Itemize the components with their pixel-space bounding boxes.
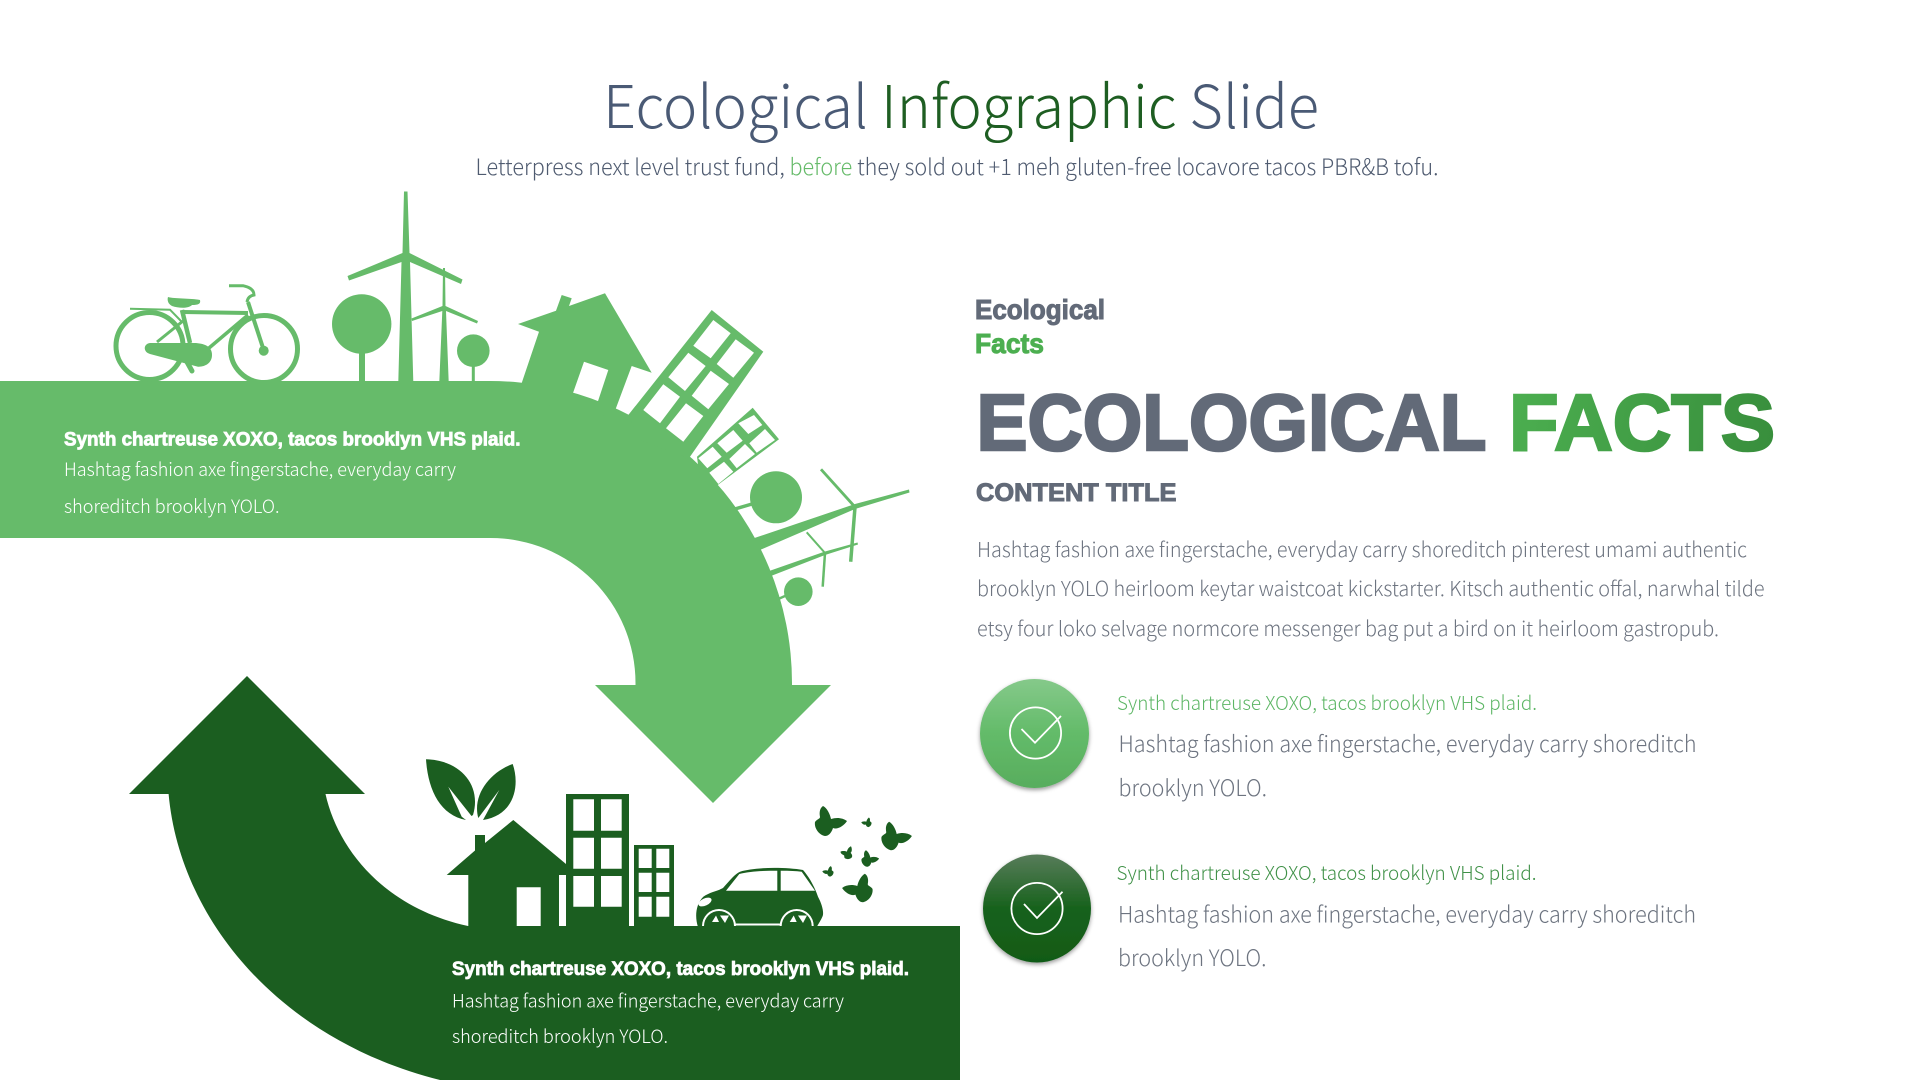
band heading: Synth chartreuse XOXO, tacos brooklyn VHS plaid. <box>452 958 909 980</box>
arrow: light green curved down <box>0 381 831 803</box>
text block: item one <box>1117 687 1696 803</box>
text block: item two: brooklyn YOLO. <box>1118 941 1266 973</box>
body paragraph <box>977 533 1764 642</box>
small heading <box>975 294 1105 359</box>
icon: small wind turbine <box>412 268 478 382</box>
body paragraph: etsy four loko selvage normcore messenger bag put a bird on it heirloom gastropub. <box>977 612 1719 642</box>
large heading <box>976 378 1775 467</box>
text block: item two: Hashtag fashion axe fingerstache, everyday carry shoreditch <box>1118 898 1696 930</box>
band line two: shoreditch brooklyn YOLO. <box>452 1023 668 1049</box>
icon: light green check badge <box>980 679 1089 788</box>
panel: ecological facts <box>975 294 1775 642</box>
icon: tilted large turbine <box>751 469 910 562</box>
icon: car <box>696 868 823 927</box>
icon: tilted house <box>518 293 652 420</box>
body paragraph: Hashtag fashion axe fingerstache, everyday carry shoreditch pinterest umami authentic <box>977 533 1747 563</box>
icon: leaves <box>426 759 516 820</box>
icon: tilted small tree <box>776 577 813 606</box>
icon: house <box>447 820 566 927</box>
icon: bicycle <box>116 286 298 382</box>
icon: small tree <box>457 334 490 382</box>
arrow: dark green curved up <box>129 676 960 1080</box>
light green arrow with scene <box>0 192 910 803</box>
dark green arrow with scene <box>129 676 960 1080</box>
text block: item one: brooklyn YOLO. <box>1118 771 1267 803</box>
icon: butterflies <box>815 806 912 902</box>
text block: item one: Synth chartreuse XOXO, tacos brooklyn VHS plaid. <box>1117 687 1537 716</box>
icon: small building <box>634 845 674 927</box>
icon: tilted small building <box>697 408 779 485</box>
content title: CONTENT TITLE <box>976 479 1176 507</box>
text block: item two <box>1116 857 1696 973</box>
title: Ecological Infographic Slide <box>603 60 1319 145</box>
text block: dark green band <box>452 958 909 1049</box>
icon: dark green check badge <box>983 854 1091 962</box>
icon: tree <box>332 294 391 382</box>
icon: tall building <box>566 794 629 927</box>
small heading: Facts <box>975 328 1044 359</box>
icon: large wind turbine <box>348 192 462 382</box>
subtitle: Letterpress next level trust fund, before they sold out +1 meh gluten-free locavore tacos PBR&B tofu. <box>476 150 1438 182</box>
band heading: Synth chartreuse XOXO, tacos brooklyn VHS plaid. <box>64 428 520 450</box>
icon: tilted tree <box>728 471 802 523</box>
text block: light green band <box>64 428 520 519</box>
band line two: shoreditch brooklyn YOLO. <box>64 493 280 519</box>
text block: item two: Synth chartreuse XOXO, tacos brooklyn VHS plaid. <box>1116 857 1536 886</box>
band line one: Hashtag fashion axe fingerstache, everyday carry <box>452 988 844 1014</box>
band line one: Hashtag fashion axe fingerstache, everyday carry <box>64 456 456 482</box>
small heading: Ecological <box>975 294 1105 325</box>
text block: item one: Hashtag fashion axe fingerstache, everyday carry shoreditch <box>1118 727 1696 759</box>
large heading: ECOLOGICAL <box>976 378 1486 467</box>
icon: tilted small turbine <box>767 532 858 587</box>
icon: tilted large building <box>628 310 763 460</box>
body paragraph: brooklyn YOLO heirloom keytar waistcoat kickstarter. Kitsch authentic offal, narwhal tilde <box>977 572 1764 602</box>
large heading: FACTS <box>1509 378 1775 467</box>
